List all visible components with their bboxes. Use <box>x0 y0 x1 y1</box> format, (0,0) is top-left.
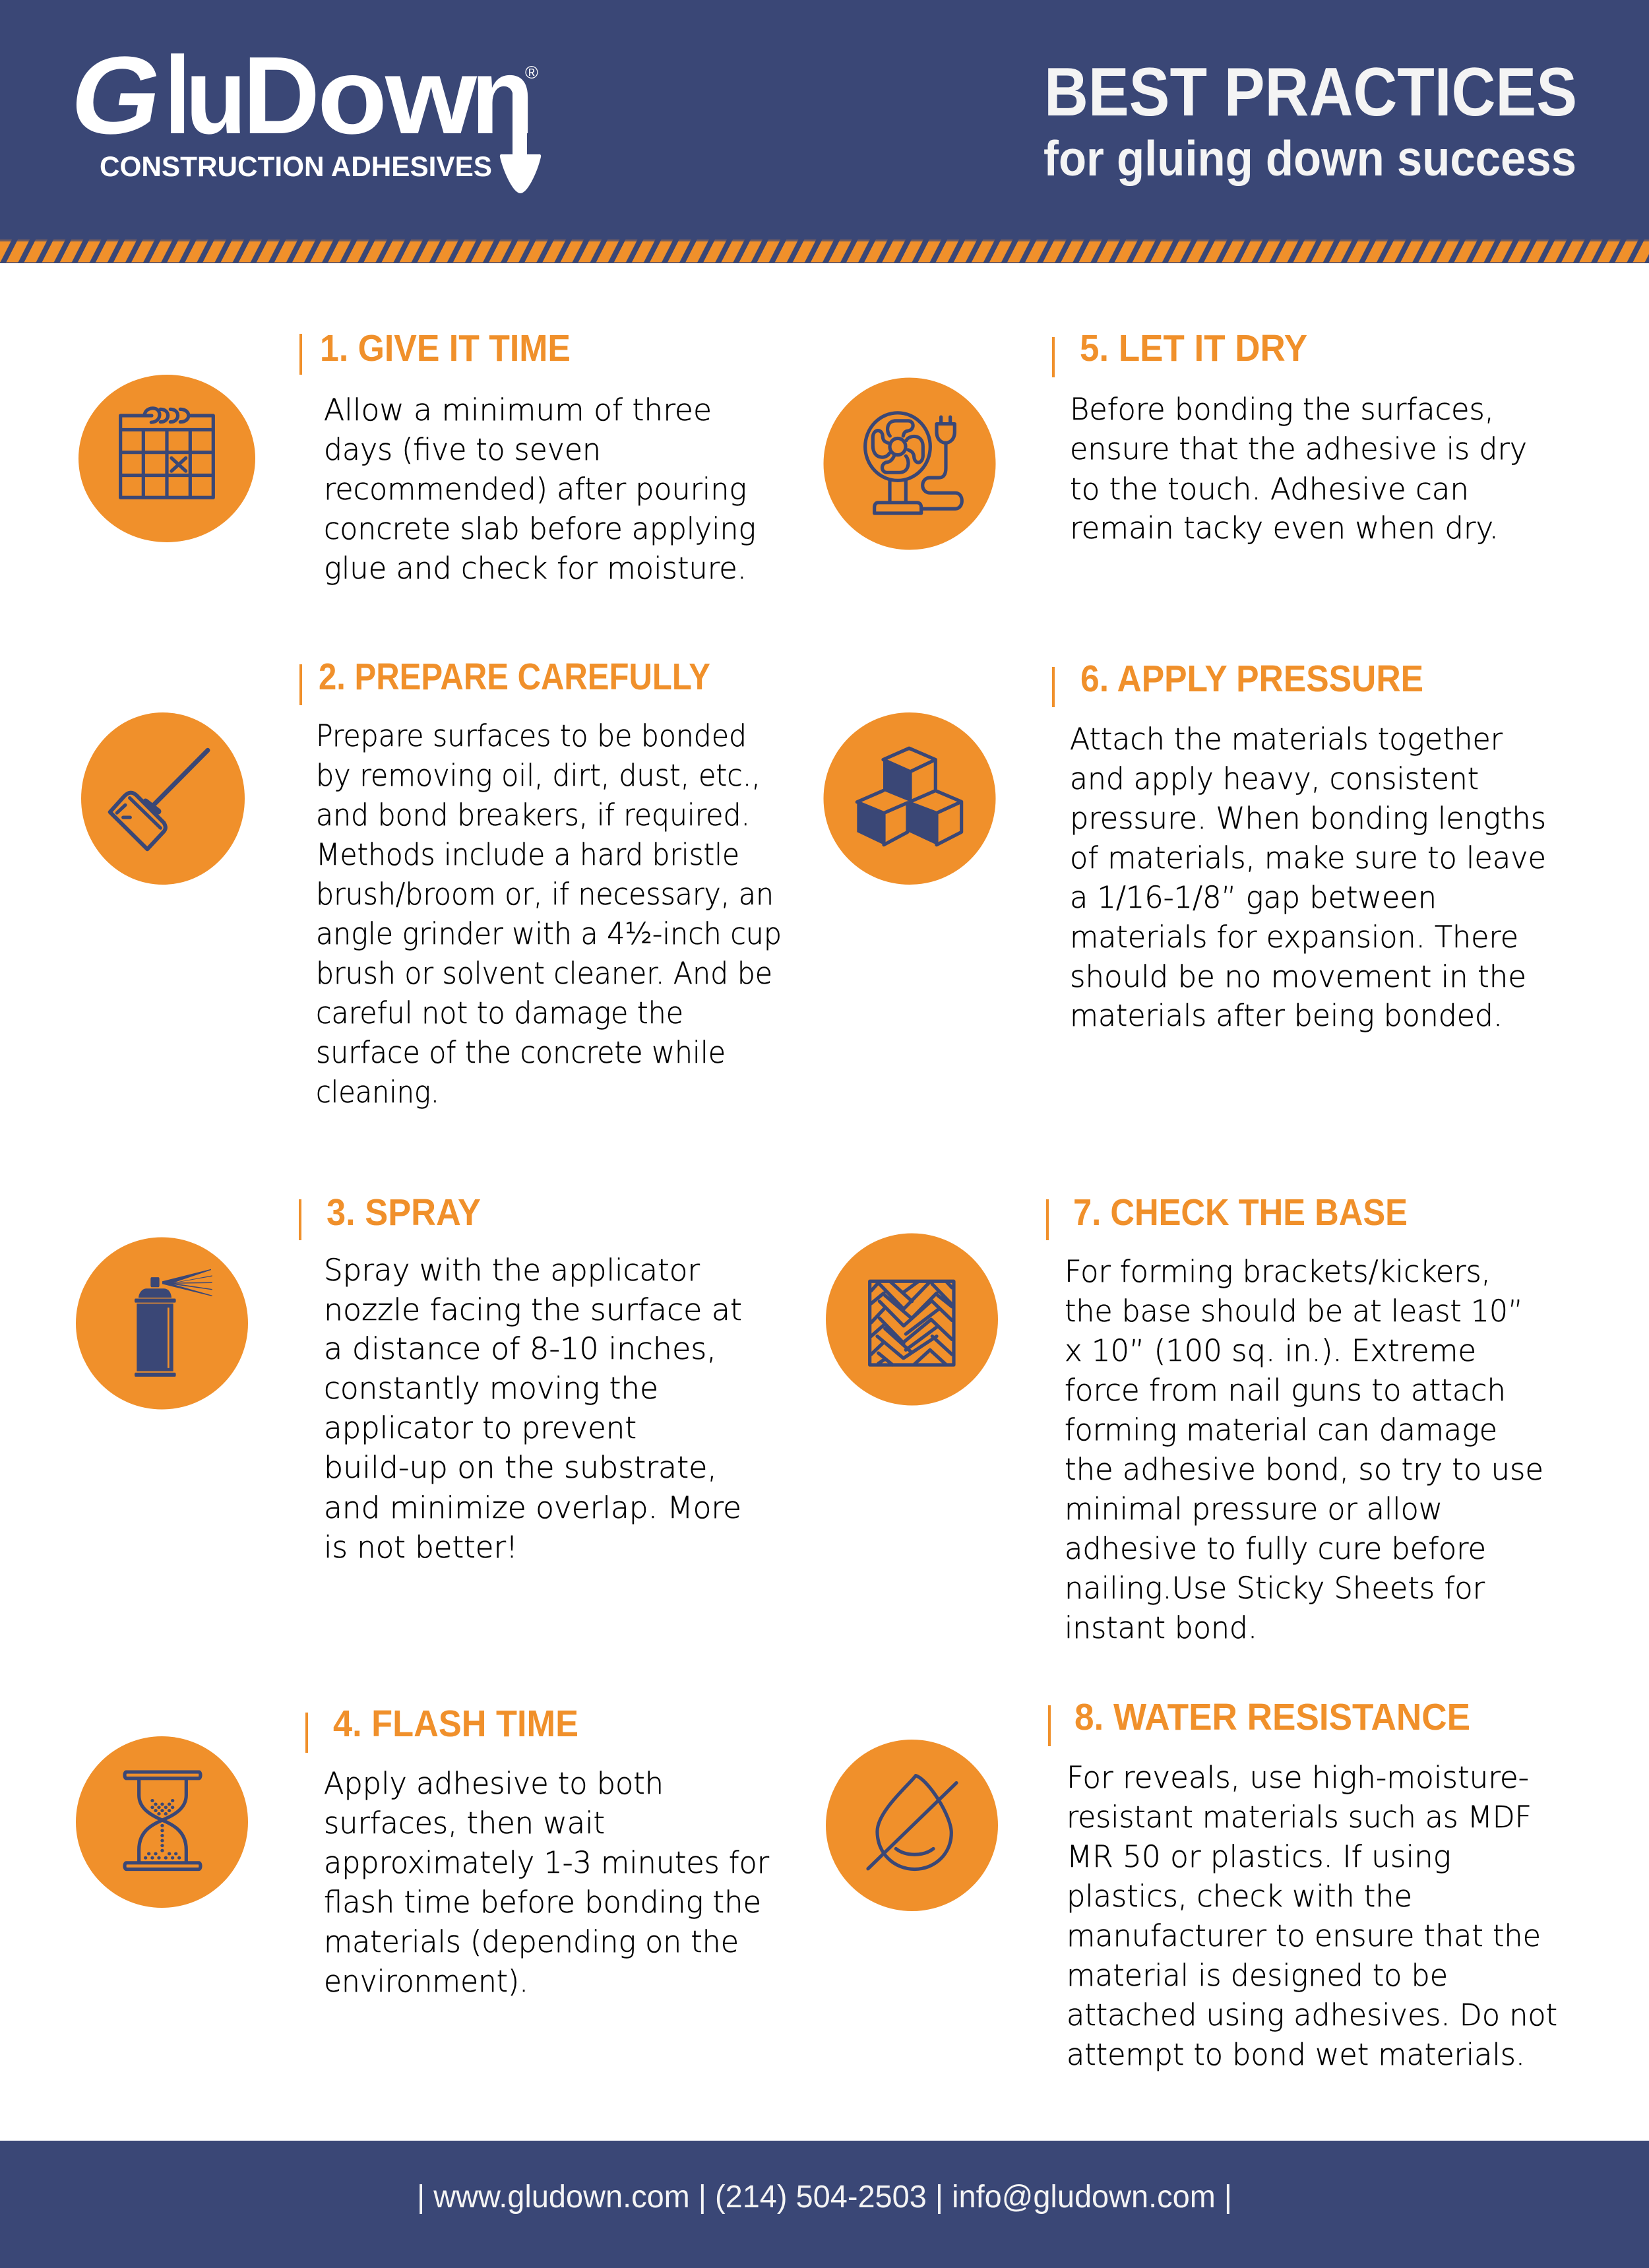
body text: of materials, make sure to leave <box>1070 840 1546 875</box>
body text: surfaces, then wait <box>324 1806 605 1841</box>
icon: calendar <box>121 408 213 497</box>
body text: instant bond. <box>1065 1610 1257 1645</box>
body text: For reveals, use high-moisture- <box>1067 1760 1529 1795</box>
body text: resistant materials such as MDF <box>1067 1800 1532 1835</box>
body text: surface of the concrete while <box>316 1035 726 1070</box>
panel: 2 prepare carefully <box>81 656 782 1110</box>
body text <box>324 1253 742 1565</box>
panel: 5 let it dry <box>823 327 1527 550</box>
icon: no water drop <box>868 1776 956 1869</box>
logo: GluDown construction adhesives: G <box>62 34 173 157</box>
heading: 2. PREPARE CAREFULLY <box>319 656 710 698</box>
body text: materials (depending on the <box>324 1924 739 1959</box>
body text: and apply heavy, consistent <box>1070 761 1479 796</box>
body text: build-up on the substrate, <box>324 1450 717 1485</box>
body text: ensure that the adhesive is dry <box>1070 431 1527 466</box>
body text: Attach the materials together <box>1070 722 1503 757</box>
body text <box>1065 1254 1543 1645</box>
body text: the base should be at least 10” <box>1065 1294 1523 1329</box>
body text: nailing.Use Sticky Sheets for <box>1065 1571 1485 1606</box>
title: best practices: for gluing down success <box>1043 131 1576 186</box>
heading: 4. FLASH TIME <box>333 1703 578 1745</box>
heading: 3. SPRAY <box>327 1191 481 1234</box>
body text: and minimize overlap. More <box>324 1490 741 1525</box>
body text: careful not to damage the <box>316 995 683 1030</box>
icon: fan <box>865 413 962 513</box>
body text: Apply adhesive to both <box>324 1766 664 1801</box>
heading: 8. WATER RESISTANCE <box>1074 1696 1470 1738</box>
logo: GluDown construction adhesives: D <box>243 34 320 157</box>
body text: environment). <box>324 1964 528 1999</box>
body text: For forming brackets/kickers, <box>1065 1254 1491 1289</box>
body text: materials after being bonded. <box>1070 998 1503 1033</box>
body text: should be no movement in the <box>1070 959 1526 994</box>
body text: a distance of 8-10 inches, <box>324 1331 716 1366</box>
title: best practices: BEST PRACTICES <box>1044 54 1577 131</box>
panel: 6 apply pressure <box>823 658 1546 1033</box>
body text <box>324 393 756 586</box>
body text: Before bonding the surfaces, <box>1070 392 1494 427</box>
heading: 5. LET IT DRY <box>1080 327 1307 369</box>
body text: cleaning. <box>316 1075 439 1110</box>
body text: pressure. When bonding lengths <box>1070 801 1546 836</box>
body text <box>324 1766 769 1999</box>
body text <box>316 718 782 1110</box>
body text: concrete slab before applying <box>324 511 756 546</box>
heading: 6. APPLY PRESSURE <box>1080 658 1423 700</box>
panel: 8 water resistance <box>826 1696 1557 2072</box>
logo: GluDown construction adhesives: n <box>471 36 534 156</box>
logo: GluDown construction adhesives: w <box>385 36 478 156</box>
panel: 3 spray <box>76 1191 742 1565</box>
heading <box>299 1191 481 1240</box>
panel: 4 flash time <box>76 1703 769 1999</box>
logo: GluDown construction adhesives: l <box>164 34 191 157</box>
header band <box>0 0 1649 263</box>
body text: minimal pressure or allow <box>1065 1492 1443 1527</box>
icon: herringbone tiles <box>870 1281 954 1365</box>
body text: the adhesive bond, so try to use <box>1065 1452 1543 1487</box>
icon: broom <box>110 750 208 849</box>
body text: manufacturer to ensure that the <box>1067 1918 1541 1953</box>
body text: x 10” (100 sq. in.). Extreme <box>1065 1333 1476 1368</box>
footer contact bar <box>0 2141 1649 2268</box>
body text: remain tacky even when dry. <box>1070 511 1499 546</box>
body text: glue and check for moisture. <box>324 551 747 586</box>
body text: applicator to prevent <box>324 1410 637 1445</box>
heading: 7. CHECK THE BASE <box>1073 1191 1408 1234</box>
body text: Prepare surfaces to be bonded <box>316 718 747 753</box>
body text: nozzle facing the surface at <box>324 1292 742 1327</box>
body text: Methods include a hard bristle <box>316 837 739 872</box>
body text: approximately 1-3 minutes for <box>324 1845 769 1880</box>
body text: adhesive to fully cure before <box>1065 1531 1486 1566</box>
body text: flash time before bonding the <box>324 1885 761 1920</box>
body text: brush or solvent cleaner. And be <box>316 956 772 991</box>
body text: is not better! <box>324 1530 518 1565</box>
title: best practices <box>1043 54 1577 186</box>
body text: constantly moving the <box>324 1371 658 1406</box>
icon: hourglass <box>125 1772 201 1869</box>
body text: force from nail guns to attach <box>1065 1373 1506 1408</box>
body text <box>1070 722 1546 1033</box>
body text: a 1/16-1/8” gap between <box>1070 880 1437 915</box>
logo: GluDown construction adhesives: u <box>185 36 247 156</box>
body text: plastics, check with the <box>1067 1879 1412 1914</box>
panel: 1 give it time <box>78 327 756 586</box>
icon: spray can <box>135 1269 212 1377</box>
logo: GluDown construction adhesives: o <box>317 36 387 156</box>
logo: GluDown construction adhesives: ® <box>525 63 538 82</box>
body text: Allow a minimum of three <box>324 393 712 427</box>
panel: 7 check the base <box>826 1191 1543 1645</box>
body text: days (five to seven <box>324 432 601 467</box>
body text: materials for expansion. There <box>1070 920 1518 955</box>
icon: cubes <box>857 748 962 845</box>
heading: 1. GIVE IT TIME <box>320 327 571 369</box>
body text: brush/broom or, if necessary, an <box>316 877 774 912</box>
body text: recommended) after pouring <box>324 472 747 507</box>
footer contact bar: | www.gludown.com | (214) 504-2503 | info@gludown.com | <box>417 2180 1232 2215</box>
logo: GluDown construction adhesives: CONSTRUCTION ADHESIVES <box>100 151 492 183</box>
body text: attached using adhesives. Do not <box>1067 1998 1557 2032</box>
body text: to the touch. Adhesive can <box>1070 472 1469 507</box>
logo: GluDown construction adhesives <box>62 34 541 193</box>
body text: attempt to bond wet materials. <box>1067 2037 1525 2072</box>
body text: and bond breakers, if required. <box>316 798 750 833</box>
body text <box>1067 1760 1557 2072</box>
body text: angle grinder with a 4½-inch cup <box>316 916 782 951</box>
body text <box>1070 392 1527 546</box>
body text: Spray with the applicator <box>324 1253 700 1288</box>
body text: by removing oil, dirt, dust, etc., <box>316 758 761 793</box>
body text: forming material can damage <box>1065 1412 1497 1447</box>
body text: MR 50 or plastics. If using <box>1067 1839 1451 1874</box>
body text: material is designed to be <box>1067 1958 1448 1993</box>
